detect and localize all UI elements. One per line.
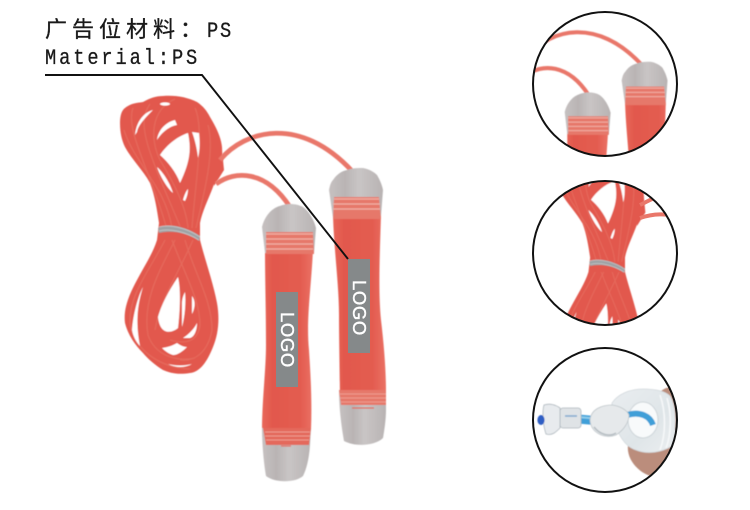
cap inner bore xyxy=(628,402,658,438)
detail circle: internal swivel bearing xyxy=(533,348,690,492)
title: Chinese material label: PS xyxy=(207,20,233,45)
rope coil xyxy=(120,96,224,374)
left handle logo plate xyxy=(276,292,298,387)
right handle logo plate: LOGO xyxy=(349,280,370,336)
bullet bearing xyxy=(590,405,629,436)
blue tip xyxy=(537,415,545,425)
leader line to logo plate xyxy=(45,75,348,259)
right handle logo plate xyxy=(348,259,370,353)
clear cap xyxy=(612,389,675,453)
left handle logo plate: LOGO xyxy=(277,312,298,368)
skipping rope handles with cords xyxy=(216,133,386,481)
detail circle: rope tie xyxy=(532,180,678,326)
barrel and flange xyxy=(560,408,581,428)
blue cord xyxy=(627,414,653,425)
detail circle: handle caps xyxy=(532,11,678,157)
subtitle: English material label: Material:PS xyxy=(45,47,200,72)
finger xyxy=(627,446,671,476)
title: Chinese material label: 广告位材料： xyxy=(45,17,207,42)
